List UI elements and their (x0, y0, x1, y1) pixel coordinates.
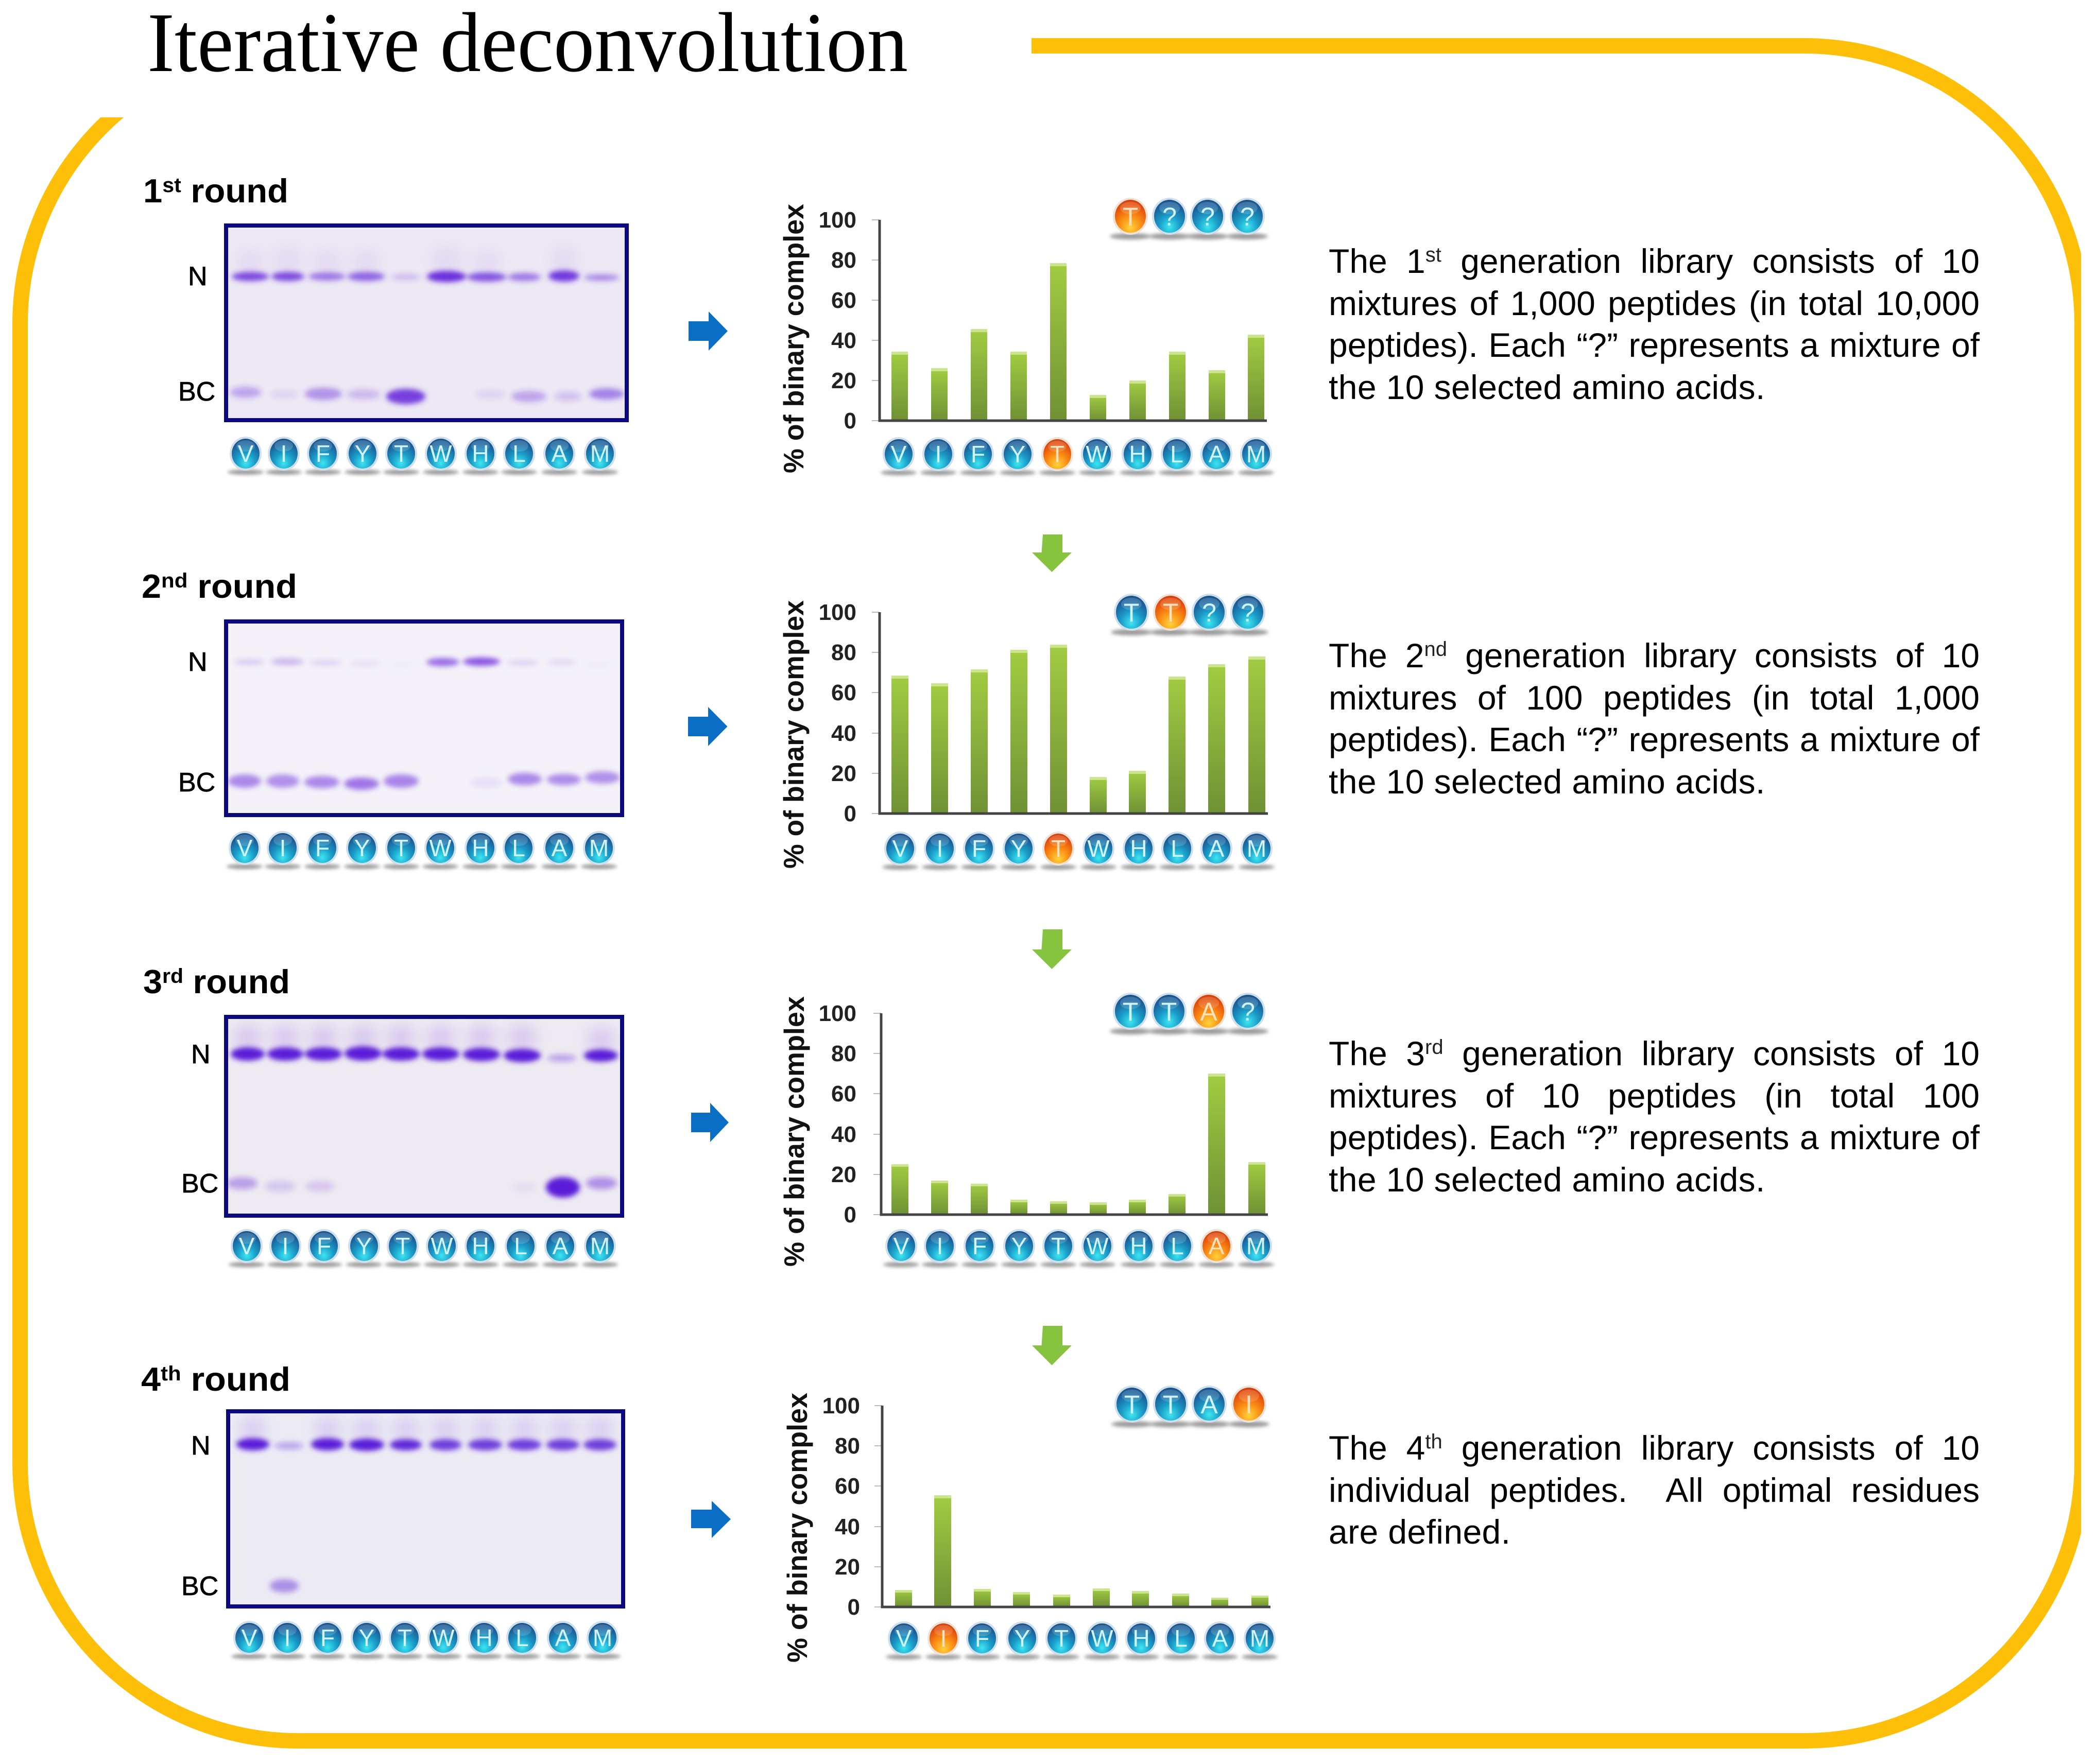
residue row: chart round 4 (886, 1621, 1278, 1659)
chart: round 1 (778, 204, 1267, 473)
residue row: gel round 4: W (432, 1624, 455, 1651)
residue row: gel round 2: A (552, 835, 568, 861)
residue row: gel round 1: Y (355, 440, 370, 467)
text block: round 2 description: peptides). Each “?” represents a mixture of (1329, 720, 1980, 758)
residue row: chart round 2: A (1209, 835, 1225, 862)
residue row: chart round 2: H (1130, 835, 1147, 862)
residue row: chart round 3: T (1051, 1233, 1066, 1259)
residue row: gel round 4: T (398, 1624, 412, 1651)
residue row: chart round 2: M (1247, 835, 1266, 862)
residue row: chart round 1: V (891, 441, 907, 468)
text block: round 3 description: the 10 selected amino acids. (1329, 1161, 1765, 1199)
heading: 1st round: round (181, 172, 288, 210)
heading: 2nd round: round (187, 567, 297, 605)
residue row: gel round 4: V (242, 1624, 257, 1651)
residue row: gel round 1: M (590, 440, 610, 467)
residue row: gel round 2: I (280, 835, 286, 861)
residue row: chart round 2: T (1051, 835, 1066, 862)
residue row: gel round 3: F (317, 1233, 331, 1259)
residue row: chart round 1: M (1246, 441, 1266, 468)
residue row: chart round 4: F (975, 1625, 989, 1652)
residue row: chart round 1: F (971, 441, 985, 468)
chart: round 1: 40 (831, 328, 856, 353)
chart: round 4 (781, 1393, 1270, 1663)
chart: round 4: 40 (835, 1514, 860, 1540)
residue row: gel round 1: A (552, 440, 568, 467)
text block: round 3 description (1329, 1034, 1980, 1199)
text block: round 1 description: The 1st generation library consists of 10 (1329, 242, 1980, 280)
residue row: gel round 1: H (472, 440, 489, 467)
text block: round 3 description: The 3rd generation library consists of 10 (1329, 1034, 1980, 1073)
heading: 4th round: 4 (141, 1360, 160, 1398)
residue row: gel round 3: H (472, 1233, 489, 1259)
residue row: gel round 4 (231, 1621, 621, 1659)
residue row: chart round 3: M (1246, 1233, 1266, 1259)
residue row: chart round 2: F (972, 835, 986, 862)
text block: round 1 description: mixtures of 1,000 peptides (in total 10,000 (1329, 284, 1980, 322)
text block: round 2 description (1329, 636, 1980, 800)
gel label N: N (188, 647, 208, 677)
sequence key: round 1: ? (1162, 202, 1177, 231)
chart: round 4: 80 (835, 1433, 860, 1459)
chart: round 1: % of binary complex (778, 204, 810, 473)
residue row: gel round 4: A (555, 1624, 571, 1651)
sequence key: round 2: ? (1202, 598, 1216, 627)
residue row: gel round 1: F (316, 440, 330, 467)
sequence key: round 2: T (1163, 598, 1178, 627)
text block: round 1 description (1329, 242, 1980, 406)
panel: gel round 3 (226, 1017, 622, 1216)
sequence key: round 4: T (1163, 1390, 1178, 1419)
residue row: gel round 1 (228, 437, 618, 475)
heading: 4th round: th (161, 1362, 181, 1385)
chart: round 3: 20 (831, 1162, 856, 1187)
chart: round 2: % of binary complex (778, 600, 810, 869)
residue row: chart round 3: H (1130, 1233, 1147, 1259)
text block: round 2 description: the 10 selected amino acids. (1329, 762, 1765, 800)
residue row: chart round 4: W (1091, 1625, 1113, 1652)
residue row: chart round 4: L (1174, 1625, 1188, 1652)
residue row: gel round 3: A (553, 1233, 569, 1259)
chart: round 2: 60 (831, 680, 856, 705)
residue row: gel round 4: F (320, 1624, 335, 1651)
residue row: chart round 2: Y (1011, 835, 1026, 862)
residue row: chart round 3: W (1086, 1233, 1109, 1259)
sequence key: round 1: ? (1200, 202, 1215, 231)
right edge mask (2081, 0, 2096, 1764)
text block: round 2 description: mixtures of 100 peptides (in total 1,000 (1329, 679, 1980, 717)
panel: gel round 2 (226, 621, 622, 815)
residue row: chart round 1: W (1086, 441, 1108, 468)
residue row: chart round 1: Y (1010, 441, 1025, 468)
residue row: gel round 3: V (239, 1233, 255, 1259)
sequence key: round 4 (1111, 1386, 1269, 1427)
residue row: chart round 3: I (937, 1233, 943, 1259)
chart: round 2: 0 (844, 801, 856, 826)
residue row: gel round 3: M (590, 1233, 610, 1259)
chart: round 1: 100 (819, 207, 856, 233)
residue row: chart round 1: A (1209, 441, 1225, 468)
text block: round 3 description: mixtures of 10 peptides (in total 100 (1329, 1076, 1980, 1114)
residue row: gel round 1: V (238, 440, 254, 467)
gel label BC: BC (178, 768, 215, 798)
chart: round 2: 80 (831, 640, 856, 665)
arrow: gel to chart round 1 (689, 312, 728, 351)
residue row: chart round 4: Y (1015, 1625, 1030, 1652)
residue row: chart round 3: Y (1011, 1233, 1027, 1259)
arrow: gel to chart round 4 (691, 1501, 731, 1538)
panel: gel round 1 (226, 226, 627, 420)
chart: round 1: 60 (831, 288, 856, 313)
residue row: gel round 4: H (475, 1624, 493, 1651)
sequence key: round 2 (1111, 594, 1268, 635)
chart: round 4: 60 (835, 1474, 860, 1499)
residue row: gel round 3: T (396, 1233, 410, 1259)
residue row: chart round 2: L (1171, 835, 1184, 862)
chart: round 2: 100 (819, 600, 856, 625)
text block: round 2 description: The 2nd generation library consists of 10 (1329, 636, 1980, 675)
sequence key: round 1: T (1123, 202, 1138, 231)
residue row: chart round 1: I (935, 441, 941, 468)
chart: round 4: 100 (822, 1393, 860, 1419)
residue row: gel round 2: T (394, 835, 408, 861)
residue row: chart round 4: H (1132, 1625, 1150, 1652)
heading: 4th round: round (181, 1360, 290, 1398)
panel: gel round 4 (228, 1411, 623, 1606)
chart: round 3: 100 (819, 1001, 856, 1026)
chart: round 4: % of binary complex (781, 1393, 813, 1663)
gel label N: N (191, 1431, 211, 1461)
title backing panel (0, 0, 1032, 117)
gel label BC: BC (181, 1571, 218, 1601)
residue row: chart round 4: V (896, 1625, 912, 1652)
sequence key: round 4: T (1124, 1390, 1140, 1419)
residue row: gel round 1: I (281, 440, 287, 467)
residue row: gel round 4: Y (359, 1624, 374, 1651)
heading: 2nd round: nd (161, 569, 187, 592)
residue row: chart round 1: L (1170, 441, 1183, 468)
arrow: round 2 to round 3 (1032, 929, 1072, 969)
residue row: gel round 4: L (516, 1624, 529, 1651)
sequence key: round 2: T (1124, 598, 1139, 627)
residue row: gel round 3 (229, 1229, 618, 1267)
residue row: gel round 1: L (512, 440, 526, 467)
sequence key: round 1: ? (1240, 202, 1255, 231)
gel label N: N (188, 262, 208, 291)
residue row: chart round 1: T (1050, 441, 1064, 468)
chart: round 2: 20 (831, 761, 856, 786)
residue row: chart round 4: A (1212, 1625, 1228, 1652)
residue row: chart round 2: I (937, 835, 943, 862)
chart: round 4: 0 (848, 1595, 860, 1620)
residue row: chart round 4: M (1250, 1625, 1269, 1652)
sequence key: round 4: I (1245, 1390, 1252, 1419)
heading: 3rd round: 3 (143, 963, 162, 1000)
arrow: gel to chart round 2 (688, 707, 727, 746)
residue row: gel round 1: T (394, 440, 408, 467)
text block: round 4 description (1329, 1429, 1980, 1551)
residue row: gel round 2: M (589, 835, 609, 861)
chart: round 1: 0 (844, 408, 856, 434)
text block: round 4 description: The 4th generation library consists of 10 (1329, 1429, 1980, 1467)
text block: round 3 description: peptides). Each “?” represents a mixture of (1329, 1118, 1980, 1156)
text block: round 4 description: individual peptides. All optimal residues (1329, 1471, 1980, 1509)
chart: round 1: 80 (831, 248, 856, 273)
residue row: gel round 4: I (284, 1624, 290, 1651)
residue row: chart round 3: V (894, 1233, 909, 1259)
residue row: gel round 2: H (472, 835, 489, 861)
gel label N: N (191, 1040, 211, 1069)
text block: round 4 description: are defined. (1329, 1513, 1510, 1551)
sequence key: round 1 (1110, 198, 1268, 239)
chart: round 3: 80 (831, 1041, 856, 1066)
residue row: gel round 3: I (282, 1233, 288, 1259)
sequence key: round 3: A (1200, 997, 1217, 1026)
chart: round 3 (778, 996, 1268, 1267)
chart: round 4: 20 (835, 1554, 860, 1580)
heading: 3rd round: round (183, 963, 290, 1000)
gel label BC: BC (178, 377, 215, 407)
heading: 1st round: 1 (143, 172, 162, 210)
residue row: chart round 2: W (1087, 835, 1110, 862)
chart: round 1: 20 (831, 368, 856, 393)
sequence key: round 3 (1110, 993, 1268, 1034)
sequence key: round 3: T (1123, 997, 1138, 1026)
chart: round 2: 40 (831, 721, 856, 746)
gel label BC: BC (181, 1169, 218, 1199)
residue row: gel round 2: F (315, 835, 330, 861)
arrow: gel to chart round 3 (691, 1103, 729, 1142)
heading: 2nd round: 2 (142, 567, 160, 605)
residue row: gel round 4: M (593, 1624, 612, 1651)
residue row: gel round 2: L (512, 835, 525, 861)
sequence key: round 2: ? (1241, 598, 1255, 627)
residue row: gel round 2: W (429, 835, 452, 861)
chart: round 2 (778, 600, 1268, 869)
residue row: chart round 3: L (1171, 1233, 1184, 1259)
residue row: chart round 2: V (892, 835, 908, 862)
residue row: chart round 3 (883, 1229, 1274, 1267)
residue row: chart round 3: A (1209, 1233, 1225, 1259)
chart: round 3: 60 (831, 1081, 856, 1106)
residue row: chart round 4: T (1054, 1625, 1069, 1652)
chart: round 3: 0 (844, 1202, 856, 1227)
arrow: round 1 to round 2 (1032, 534, 1072, 572)
residue row: chart round 3: F (972, 1233, 987, 1259)
residue row: chart round 1: H (1129, 441, 1146, 468)
residue row: chart round 4: I (940, 1625, 947, 1652)
residue row: gel round 2: Y (354, 835, 370, 861)
residue row: gel round 1: W (429, 440, 452, 467)
text block: round 1 description: peptides). Each “?” represents a mixture of (1329, 326, 1980, 364)
residue row: gel round 3: W (431, 1233, 453, 1259)
residue row: gel round 2 (227, 831, 617, 869)
residue row: gel round 3: Y (356, 1233, 372, 1259)
chart: round 3: % of binary complex (778, 996, 810, 1267)
residue row: gel round 2: V (237, 835, 253, 861)
residue row: chart round 2 (882, 832, 1275, 870)
heading: 1st round: st (162, 174, 181, 197)
sequence key: round 4: A (1200, 1390, 1218, 1419)
arrow: round 3 to round 4 (1032, 1326, 1072, 1365)
text block: round 1 description: the 10 selected amino acids. (1329, 368, 1765, 406)
residue row: chart round 1 (881, 437, 1274, 475)
sequence key: round 3: ? (1241, 997, 1255, 1026)
chart: round 3: 40 (831, 1122, 856, 1147)
residue row: gel round 3: L (514, 1233, 527, 1259)
sequence key: round 3: T (1161, 997, 1177, 1026)
heading: 3rd round: rd (162, 965, 183, 988)
